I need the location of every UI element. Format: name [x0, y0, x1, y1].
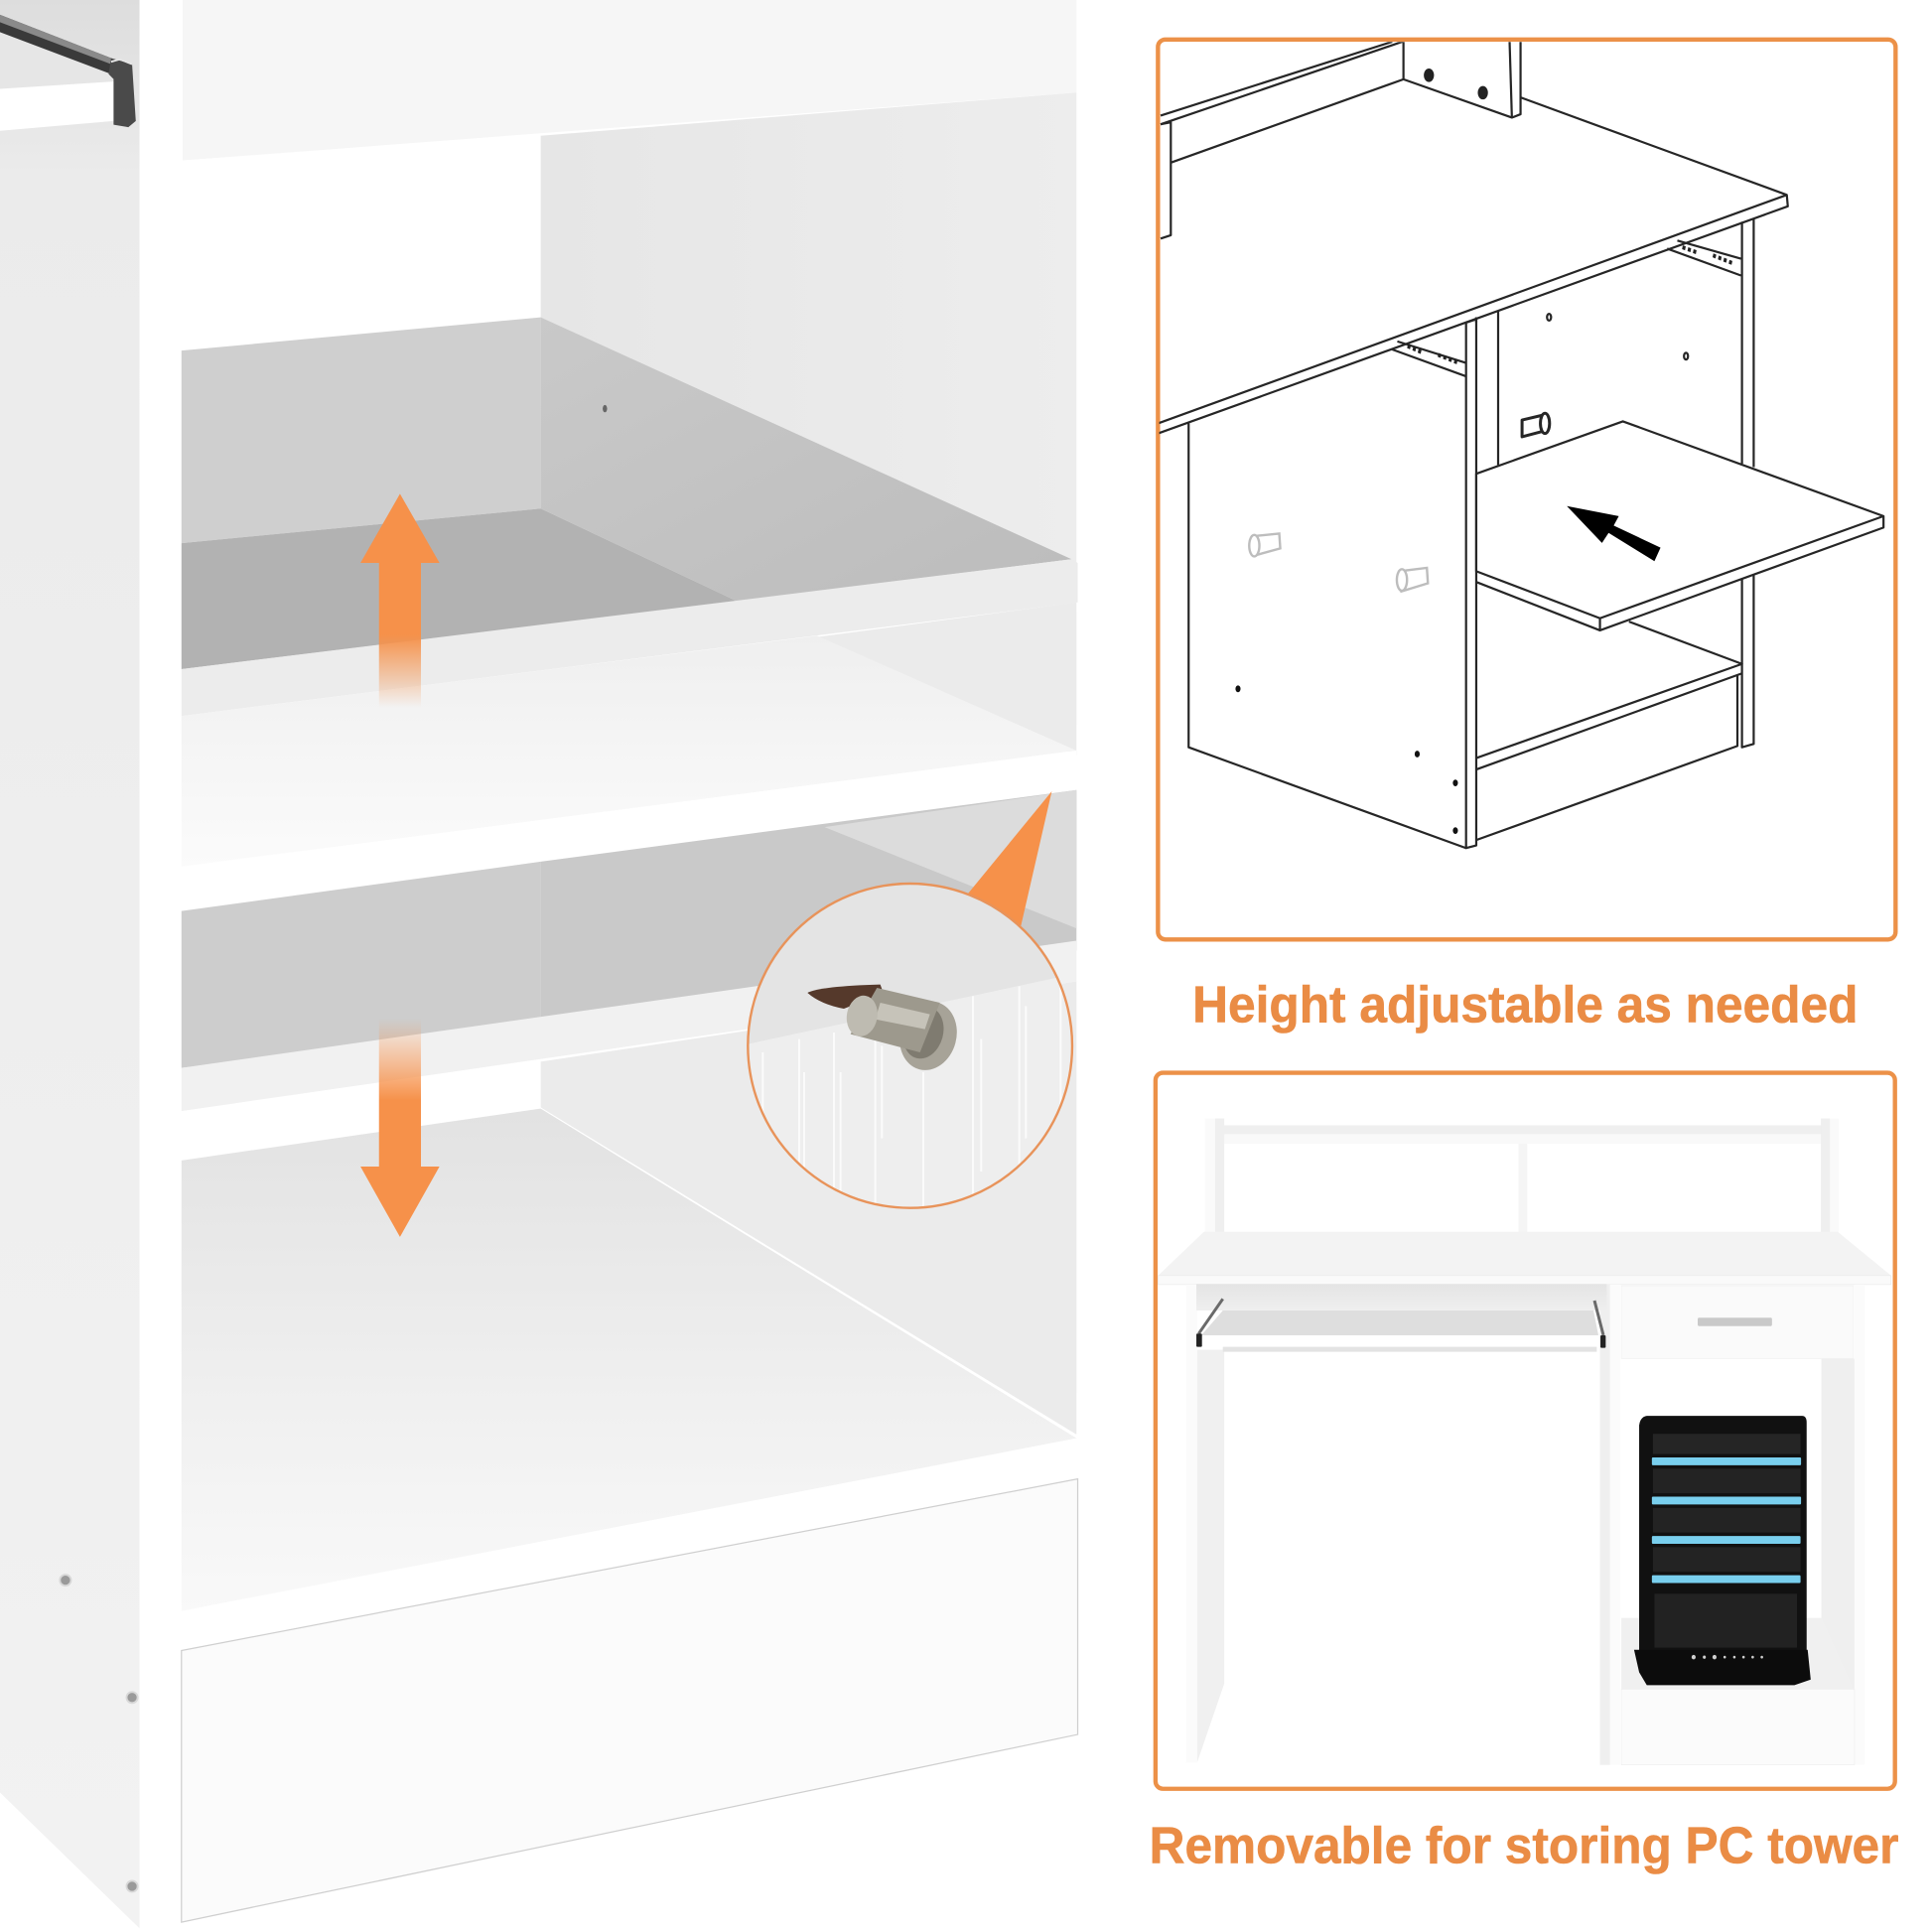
inner side wall: [541, 92, 1076, 563]
solid shelf: [182, 635, 1076, 911]
panel: cabinet close-up photo: [0, 0, 1115, 1928]
panel: desk with PC tower: [1156, 1073, 1895, 1789]
back panel and rails: [1392, 218, 1753, 748]
drawer: [1621, 1286, 1854, 1358]
arrow black: [1567, 506, 1661, 561]
kick plate: [182, 1479, 1078, 1922]
screws: [60, 1575, 138, 1892]
hutch line art: [1161, 34, 1521, 238]
ghost upper shelf: [182, 318, 1078, 716]
center panel: [1600, 1285, 1620, 1765]
lower ghost section: [182, 790, 1076, 1161]
pin tip: [846, 995, 878, 1036]
front post left: [140, 0, 182, 1928]
back wall opening: [182, 136, 541, 350]
lower side wall behind shelf: [817, 603, 1076, 756]
shelf hole: [603, 405, 608, 412]
desktop: [1158, 1232, 1891, 1285]
cabinet side panel: [0, 0, 140, 1928]
bottom shelf front edge: [182, 1439, 1078, 1648]
callout: shelf pin detail: [742, 874, 1079, 1208]
drawer front: [183, 0, 1076, 161]
pull-out tray line art: [1476, 421, 1883, 630]
panel: line drawing of tray: [1158, 34, 1895, 939]
pin body: [851, 988, 940, 1052]
under-desk back and keyboard tray: [1196, 1284, 1606, 1352]
heading: height adjustable: Height adjustable as needed: [1192, 977, 1858, 1035]
pin flange: [900, 1003, 957, 1070]
left leg: [1186, 1285, 1224, 1762]
hutch: [1205, 1119, 1839, 1243]
lower shelf line art: [1476, 621, 1742, 840]
shelf pins: [1249, 413, 1550, 592]
arrow down: [360, 1019, 440, 1237]
keyboard tray with rail: [0, 15, 136, 131]
pin wedge: [807, 985, 884, 1009]
desktop line art: [1158, 97, 1788, 434]
cabinet side line art: [1188, 320, 1476, 848]
PC tower: [1634, 1416, 1811, 1685]
wood grain: [762, 980, 1060, 1208]
arrow up: [360, 493, 440, 707]
cabinet floor: [182, 1109, 1076, 1611]
lower side wall: [541, 982, 1076, 1435]
callout pointer: [968, 791, 1051, 926]
heading: removable: Removable for storing PC tower: [1150, 1817, 1898, 1874]
front post right: [1078, 0, 1115, 1735]
right cabinet: [1621, 1285, 1864, 1765]
shelf underside: [750, 886, 1056, 1043]
